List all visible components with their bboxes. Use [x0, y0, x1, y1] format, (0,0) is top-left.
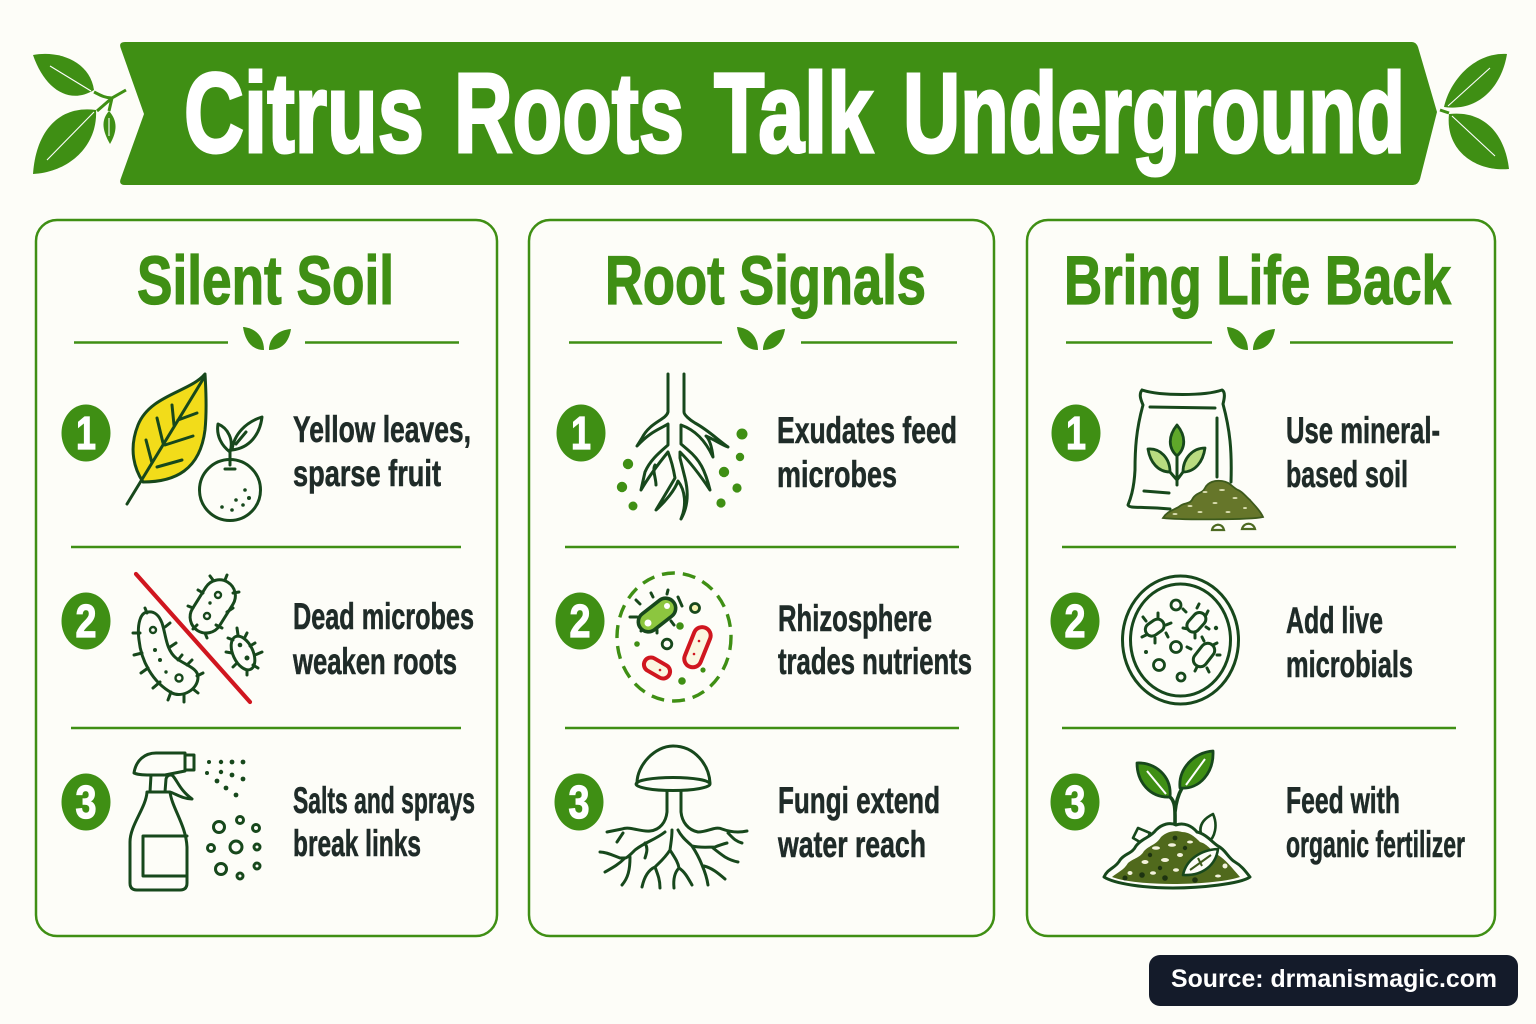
- item 1 badge: 1: [76, 407, 96, 459]
- text: exudates: [777, 410, 957, 495]
- heading: root signals: Root Signals: [605, 242, 926, 319]
- text: fungi: [777, 780, 940, 865]
- icon: mineral soil bag: [1128, 390, 1263, 530]
- item 1 badge: [62, 404, 110, 462]
- text: dead microbes: Dead microbes: [293, 596, 474, 637]
- text: live microbials: microbials: [1286, 644, 1413, 685]
- icon: yellow leaf and orange: [127, 374, 262, 520]
- text: exudates: microbes: [777, 454, 897, 495]
- text: fungi: Fungi extend: [778, 780, 940, 821]
- item 2 badge: [62, 592, 110, 650]
- item 1 badge: [1052, 404, 1100, 462]
- text: organic fertilizer: Feed with: [1286, 780, 1400, 821]
- text: yellow leaves: sparse fruit: [293, 453, 441, 494]
- icon: spray bottle and salts: [130, 753, 260, 890]
- text: mineral soil: based soil: [1286, 454, 1408, 495]
- title: Citrus: [184, 50, 424, 176]
- text: live microbials: [1286, 600, 1413, 685]
- text: salts and sprays: break links: [293, 823, 421, 864]
- item 3 badge: 3: [76, 776, 96, 828]
- icon: left leaf sprig: [33, 54, 126, 174]
- text: mineral soil: Use mineral-: [1286, 410, 1440, 451]
- icon: seedling on organic fertilizer: [1104, 751, 1250, 888]
- item 1 badge: 1: [1066, 407, 1086, 459]
- text: live microbials: Add live: [1286, 600, 1383, 641]
- panel: root signals: [529, 220, 994, 936]
- text: salts and sprays: Salts and sprays: [293, 780, 475, 821]
- text: yellow leaves: Yellow leaves,: [293, 409, 471, 450]
- item 2 badge: 2: [76, 595, 96, 647]
- item 1 badge: 1: [571, 407, 591, 459]
- source text: Source: drmanismagic.com: [1171, 965, 1497, 993]
- icon: roots with exudates: [617, 374, 748, 519]
- text: yellow leaves: [293, 409, 471, 494]
- heading: silent soil: Silent Soil: [137, 242, 394, 319]
- item 2 badge: [556, 592, 604, 650]
- icon: rhizosphere microbes: [617, 573, 731, 701]
- icon: dead microbes crossed out: [133, 574, 262, 702]
- heading divider with leaves: [569, 327, 957, 350]
- text: salts and sprays: [293, 780, 475, 864]
- text: fungi: water reach: [777, 824, 926, 865]
- icon: right leaf sprig: [1440, 54, 1509, 169]
- heading divider with leaves: [74, 327, 459, 350]
- heading divider with leaves: [1066, 327, 1453, 350]
- text: organic fertilizer: [1286, 780, 1465, 865]
- item 3 badge: [1050, 774, 1100, 830]
- item 3 badge: 3: [568, 776, 590, 828]
- source badge: [1149, 955, 1518, 1006]
- item 2 badge: [1050, 592, 1100, 650]
- item 2 badge: 2: [1064, 595, 1086, 647]
- panel: bring life back: [1027, 220, 1495, 936]
- text: exudates: Exudates feed: [777, 410, 957, 451]
- title: [184, 50, 1405, 176]
- item 3 badge: 3: [1064, 776, 1086, 828]
- item 2 badge: 2: [570, 595, 590, 647]
- title: Roots: [454, 50, 684, 176]
- title: Talk: [714, 50, 873, 176]
- text: mineral soil: [1286, 410, 1440, 495]
- text: rhizosphere: [778, 598, 972, 682]
- icon: petri dish with microbes: [1122, 576, 1238, 704]
- item 1 badge: [556, 404, 606, 462]
- text: rhizosphere: trades nutrients: [778, 641, 972, 682]
- text: dead microbes: [292, 596, 474, 682]
- text: dead microbes: weaken roots: [292, 641, 457, 682]
- text: rhizosphere: Rhizosphere: [778, 598, 932, 639]
- icon: mushroom with fungal roots: [600, 746, 747, 888]
- title banner: [120, 42, 1437, 185]
- item 3 badge: [554, 774, 604, 830]
- panel: silent soil: [36, 220, 497, 936]
- item 3 badge: [62, 774, 110, 830]
